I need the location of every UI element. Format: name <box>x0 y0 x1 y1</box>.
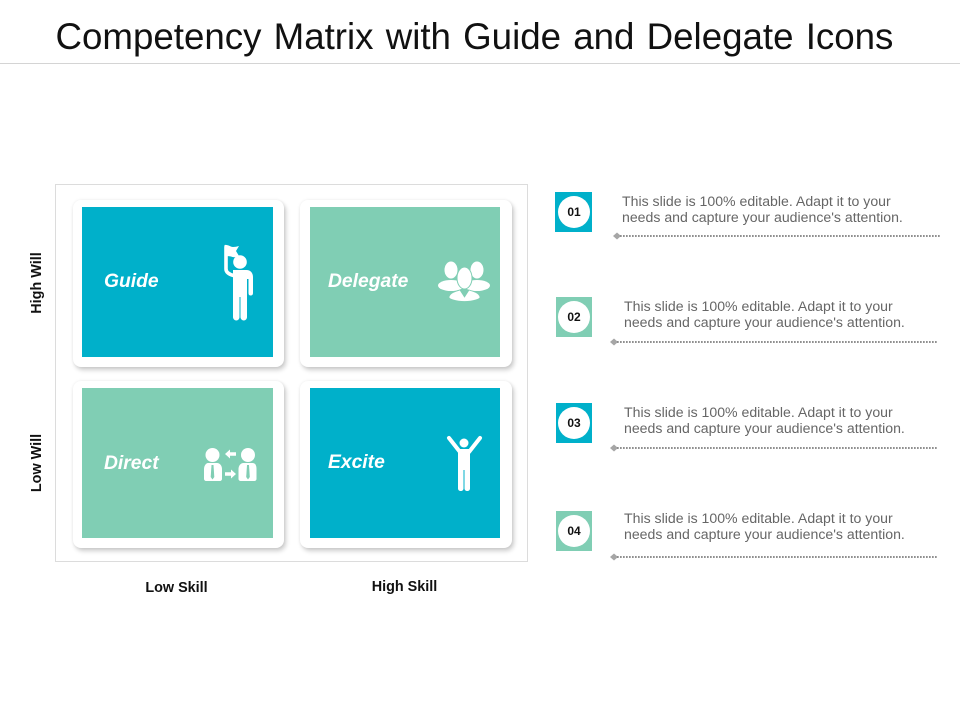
text block 02: This slide is 100% editable. Adapt it to your <box>624 298 893 314</box>
number 04 <box>558 515 590 547</box>
icon: person holding flag <box>224 244 253 320</box>
number 03 <box>558 407 590 439</box>
number 02: 02 <box>567 310 581 324</box>
text block 01: This slide is 100% editable. Adapt it to your <box>622 193 891 209</box>
panel: excite <box>310 388 500 538</box>
text block 03 <box>624 404 905 436</box>
number 01 <box>558 196 590 228</box>
panel: delegate <box>310 207 500 357</box>
divider 01 <box>613 232 940 240</box>
text block 03: needs and capture your audience's attention. <box>624 420 905 436</box>
icon: person with raised arms <box>446 436 482 491</box>
matrix frame <box>55 184 528 562</box>
label: excite: Excite <box>328 452 385 473</box>
text block 01: needs and capture your audience's attention. <box>622 209 903 225</box>
text block 01 <box>622 193 903 225</box>
badge 04 <box>556 511 592 551</box>
icon: two people exchanging <box>204 448 256 481</box>
axis label: low will: Low Will <box>29 434 45 492</box>
divider 03 <box>610 444 937 452</box>
card: guide <box>73 200 284 367</box>
text block 04: This slide is 100% editable. Adapt it to your <box>624 510 893 526</box>
card: delegate <box>300 200 512 367</box>
panel: direct <box>82 388 273 538</box>
number 04: 04 <box>567 524 581 538</box>
text block 04 <box>624 510 905 542</box>
label: direct: Direct <box>104 453 159 474</box>
badge 03 <box>556 403 592 443</box>
axis label: high will: High Will <box>29 252 45 314</box>
text block 02 <box>624 298 905 330</box>
divider 02 <box>610 338 937 346</box>
number 02 <box>558 301 590 333</box>
badge 02 <box>556 297 592 337</box>
icon: group of three people <box>438 262 490 302</box>
axis label: high skill: High Skill <box>372 579 437 595</box>
label: guide: Guide <box>104 271 159 292</box>
number 01: 01 <box>567 205 581 219</box>
card: direct <box>73 381 284 548</box>
panel: guide <box>82 207 273 357</box>
divider 04 <box>610 554 937 560</box>
badge 01 <box>555 192 592 232</box>
text block 03: This slide is 100% editable. Adapt it to your <box>624 404 893 420</box>
label: delegate: Delegate <box>328 271 408 292</box>
text block 02: needs and capture your audience's attention. <box>624 314 905 330</box>
number 03: 03 <box>567 416 581 430</box>
axis label: low skill: Low Skill <box>145 580 208 596</box>
text block 04: needs and capture your audience's attention. <box>624 526 905 542</box>
card: excite <box>300 381 512 548</box>
title: Competency Matrix with Guide and Delegate Icons <box>56 16 893 57</box>
